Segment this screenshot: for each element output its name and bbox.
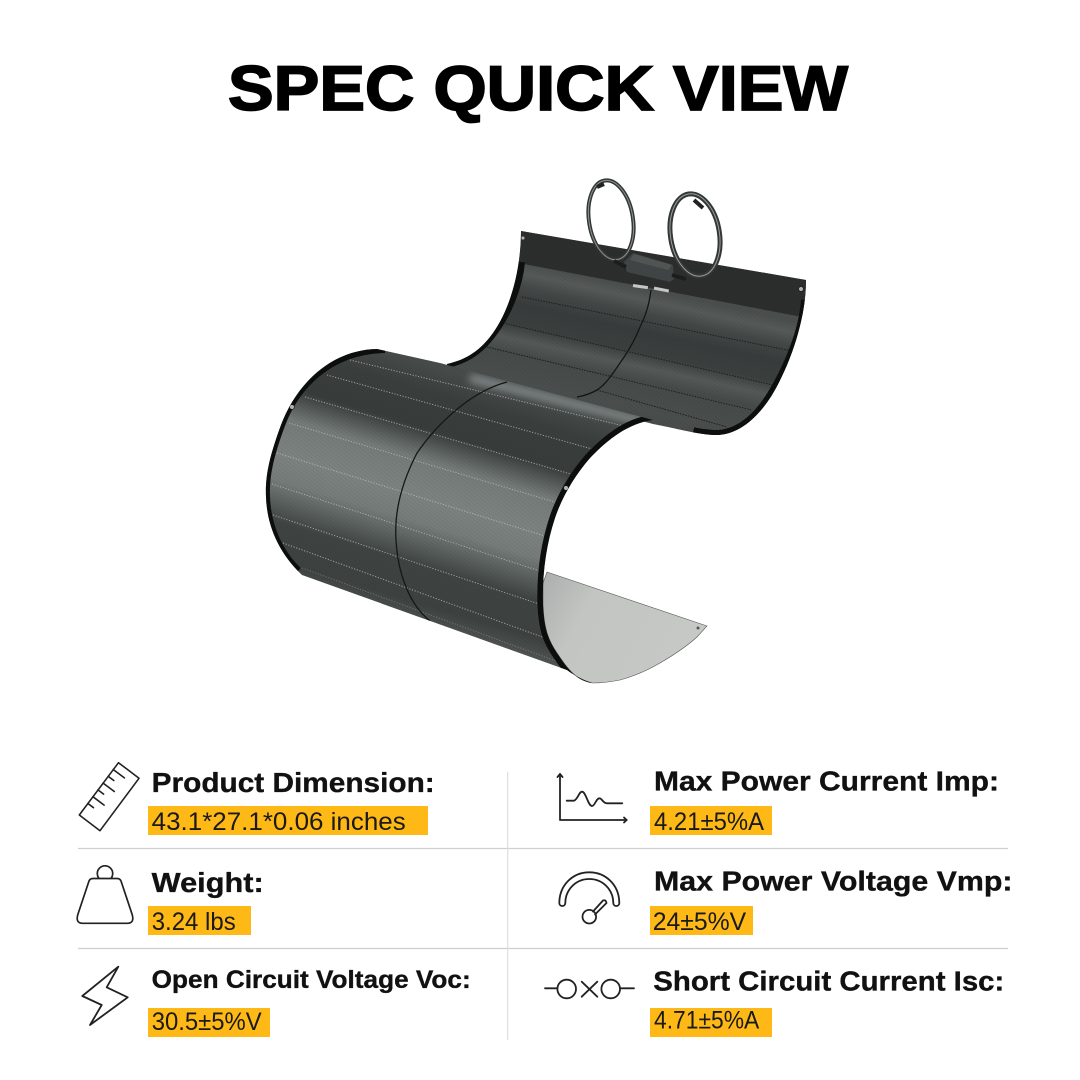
label: Product Dimension: bbox=[152, 767, 435, 798]
icon: weight bbox=[77, 866, 133, 923]
panel underside bbox=[543, 572, 707, 683]
value highlight bbox=[650, 1008, 772, 1037]
value highlight bbox=[148, 806, 428, 835]
spec: product dimension bbox=[79, 763, 435, 836]
spec: max power voltage bbox=[559, 866, 1012, 936]
front rolled panel bbox=[260, 340, 660, 690]
value highlight bbox=[148, 906, 251, 935]
cable ring right bbox=[664, 190, 726, 280]
underside grommet bbox=[696, 626, 700, 630]
icon: line chart bbox=[558, 774, 627, 822]
spec: short circuit current bbox=[545, 966, 1004, 1037]
junction box bbox=[614, 253, 686, 292]
product image: flexible solar panel bbox=[260, 177, 810, 690]
title: SPEC QUICK VIEW bbox=[228, 54, 849, 124]
spec: weight bbox=[77, 866, 264, 936]
row dividers bbox=[78, 772, 1008, 1040]
rear panel sheet bbox=[440, 225, 810, 440]
label: Weight: bbox=[152, 867, 264, 898]
cable ring left bbox=[583, 177, 639, 263]
label: Short Circuit Current Isc: bbox=[653, 966, 1004, 997]
value: 4.71±5%A bbox=[654, 1007, 760, 1035]
label: Max Power Voltage Vmp: bbox=[654, 866, 1012, 897]
value: 24±5%V bbox=[653, 908, 747, 936]
icon: open circuit symbol bbox=[545, 980, 634, 998]
label: Max Power Current Imp: bbox=[654, 766, 999, 797]
spec: open circuit voltage bbox=[82, 966, 471, 1037]
value highlight bbox=[650, 806, 772, 835]
value highlight bbox=[650, 906, 753, 935]
value highlight bbox=[148, 1008, 270, 1037]
icon: gauge bbox=[559, 872, 619, 924]
value: 43.1*27.1*0.06 inches bbox=[152, 808, 406, 836]
icon: ruler bbox=[79, 763, 139, 831]
value: 30.5±5%V bbox=[152, 1008, 262, 1036]
value: 4.21±5%A bbox=[654, 808, 764, 836]
icon: lightning bolt bbox=[82, 967, 128, 1025]
spec: max power current bbox=[558, 766, 999, 836]
grommets on rear band bbox=[521, 236, 803, 291]
value: 3.24 lbs bbox=[152, 908, 236, 936]
label: Open Circuit Voltage Voc: bbox=[152, 966, 471, 994]
